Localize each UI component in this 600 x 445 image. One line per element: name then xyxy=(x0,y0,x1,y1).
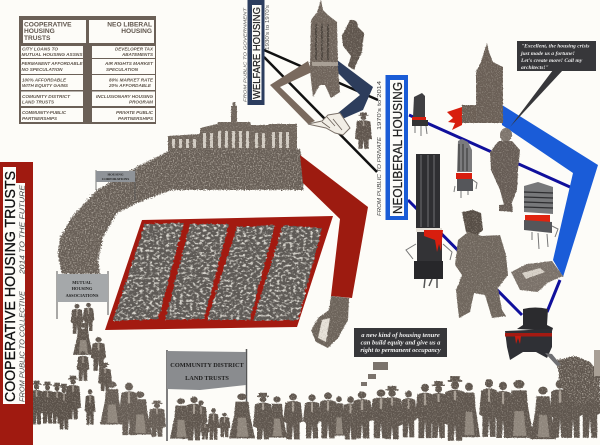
far right crowd, raised xyxy=(557,356,600,405)
walking building 2 xyxy=(454,139,477,198)
label: cooperative housing trusts: 2014 TO THE FUTURE xyxy=(18,184,26,275)
header: cooperative housing trusts: HOUSING xyxy=(24,28,55,35)
left column text: NO SPECULATION xyxy=(22,67,63,72)
right column text: 20% AFFORDABLE xyxy=(108,83,152,88)
red arrow: cooperative xyxy=(300,155,368,298)
small man in top hat xyxy=(355,113,372,149)
label: welfare housing: FROM PUBLIC TO GOVERNMENT xyxy=(242,7,248,102)
table: cooperative vs neo liberal xyxy=(19,16,156,124)
hand below red arrow xyxy=(311,296,349,348)
banner: mutual housing associations: ASSOCIATIONS xyxy=(66,293,99,298)
speech bubble: architects!" xyxy=(521,65,549,71)
aerial block 1 xyxy=(113,223,184,321)
aerial block 3 xyxy=(207,225,275,320)
blue arrow: neoliberal xyxy=(502,105,598,277)
right column text: PARTNERSHIPS xyxy=(118,116,154,121)
label: cooperative housing trusts: FROM PUBLIC TO COLLECTIVE xyxy=(18,290,26,402)
banner: housing corporations: CORPORATIONS xyxy=(102,177,129,181)
table rows, left xyxy=(21,46,83,122)
right column text: PRIVATE PUBLIC xyxy=(116,110,154,115)
label: neoliberal housing: NEOLIBERAL HOUSING xyxy=(390,82,405,214)
left column text: PARTNERSHIPS xyxy=(22,116,58,121)
callout: new kind of housing tenure xyxy=(354,328,447,357)
banner: housing corporations xyxy=(96,168,135,200)
label: welfare housing xyxy=(242,0,271,105)
handshake xyxy=(308,113,350,135)
city hall xyxy=(168,102,297,152)
top hat figure xyxy=(505,308,561,366)
header: neo liberal housing: HOUSING xyxy=(121,28,152,35)
bottom crowd xyxy=(170,374,600,441)
walking building 3 xyxy=(524,182,558,249)
banner: community district land trusts: LAND TRUSTS xyxy=(185,375,229,382)
header: cooperative housing trusts: COOPERATIVE xyxy=(24,22,72,28)
right column text: SPECULATION xyxy=(106,67,139,72)
left column text: WITH EQUITY GAINS xyxy=(22,83,69,88)
banner: housing corporations: HOUSING xyxy=(107,172,124,176)
red frame with city blocks xyxy=(105,216,333,330)
black tower on legs xyxy=(406,154,452,288)
label: neoliberal housing: 1970's to 2014 xyxy=(377,81,383,130)
left column text: PERMANENT AFFORDABLE xyxy=(22,61,83,66)
left column text: MUTUAL HOUSING ASSNS xyxy=(22,52,83,57)
small column, far right xyxy=(594,350,600,376)
man in coat, upper xyxy=(342,20,364,70)
speech bubble: just made us a fortune! xyxy=(520,51,575,57)
banner: mutual housing associations: MUTUAL xyxy=(72,280,92,285)
header: cooperative housing trusts: TRUSTS xyxy=(24,35,51,42)
left crowd xyxy=(29,376,95,429)
callout: new kind of housing tenure: can build equity and give us a xyxy=(361,340,441,346)
banner: mutual housing associations: HOUSING xyxy=(72,286,93,291)
label: cooperative housing trusts xyxy=(0,162,33,445)
fat man, upper xyxy=(490,128,520,212)
banner: mutual housing associations xyxy=(57,271,108,319)
header: neo liberal housing xyxy=(89,20,154,43)
banner: community district land trusts xyxy=(167,349,246,441)
right column text: PROGRAM xyxy=(129,100,153,104)
banner: community district land trusts: COMMUNITY DISTRICT xyxy=(170,362,244,369)
right column text: ABATEMENTS xyxy=(121,52,154,57)
right column text xyxy=(96,46,154,121)
right column text: DEVELOPER TAX xyxy=(115,46,154,52)
left column text: COMMUNITY-PUBLIC xyxy=(22,110,67,115)
callout: new kind of housing tenure: right to permanent occupancy xyxy=(360,347,441,354)
fat man, lower xyxy=(455,210,508,318)
navy arrow: welfare xyxy=(337,60,373,120)
walking building 1 xyxy=(412,93,428,136)
left column text: 100% AFFORDABLE xyxy=(22,78,67,82)
left column text: COMUNITY DISTRICT xyxy=(22,94,71,99)
speech bubble xyxy=(510,41,596,127)
table rows, right xyxy=(92,46,155,122)
header: cooperative housing trusts xyxy=(23,20,86,43)
marchers column xyxy=(71,303,112,391)
aerial block 4 xyxy=(253,225,322,321)
callout: new kind of housing tenure: a new kind of housing tenure xyxy=(361,332,440,339)
right column text: AIR RIGHTS MARKET xyxy=(104,61,154,66)
tower: neoliberal xyxy=(447,43,503,130)
header: neo liberal housing: NEO LIBERAL xyxy=(107,22,152,28)
right column text: INCLUSIONARY HOUSING xyxy=(96,94,153,99)
speech bubble: Let's create more! Call my xyxy=(520,58,583,64)
label: neoliberal housing: FROM PUBLIC TO PRIVATE xyxy=(377,137,383,216)
hand, money xyxy=(511,261,563,292)
arc of crowd xyxy=(58,149,304,274)
brown arrow: welfare xyxy=(270,61,315,124)
blue connector lines xyxy=(408,115,570,315)
left column text xyxy=(22,46,83,121)
black connector lines xyxy=(264,50,378,172)
label: welfare housing: 1930's to 1970's xyxy=(265,4,271,50)
right column text: 80% MARKET RATE xyxy=(109,78,154,82)
label: cooperative housing trusts: COOPERATIVE HOUSING TRUSTS xyxy=(3,171,19,402)
left column text: LAND TRUSTS xyxy=(22,100,55,104)
label: neoliberal housing xyxy=(377,75,408,220)
left column text: CITY LOANS TO xyxy=(22,46,58,52)
aerial block 2 xyxy=(165,224,229,320)
speech bubble: "Excellent, the housing crisis xyxy=(521,44,589,50)
small placards xyxy=(361,362,388,386)
tower: welfare xyxy=(310,0,340,98)
seated group xyxy=(100,381,166,437)
